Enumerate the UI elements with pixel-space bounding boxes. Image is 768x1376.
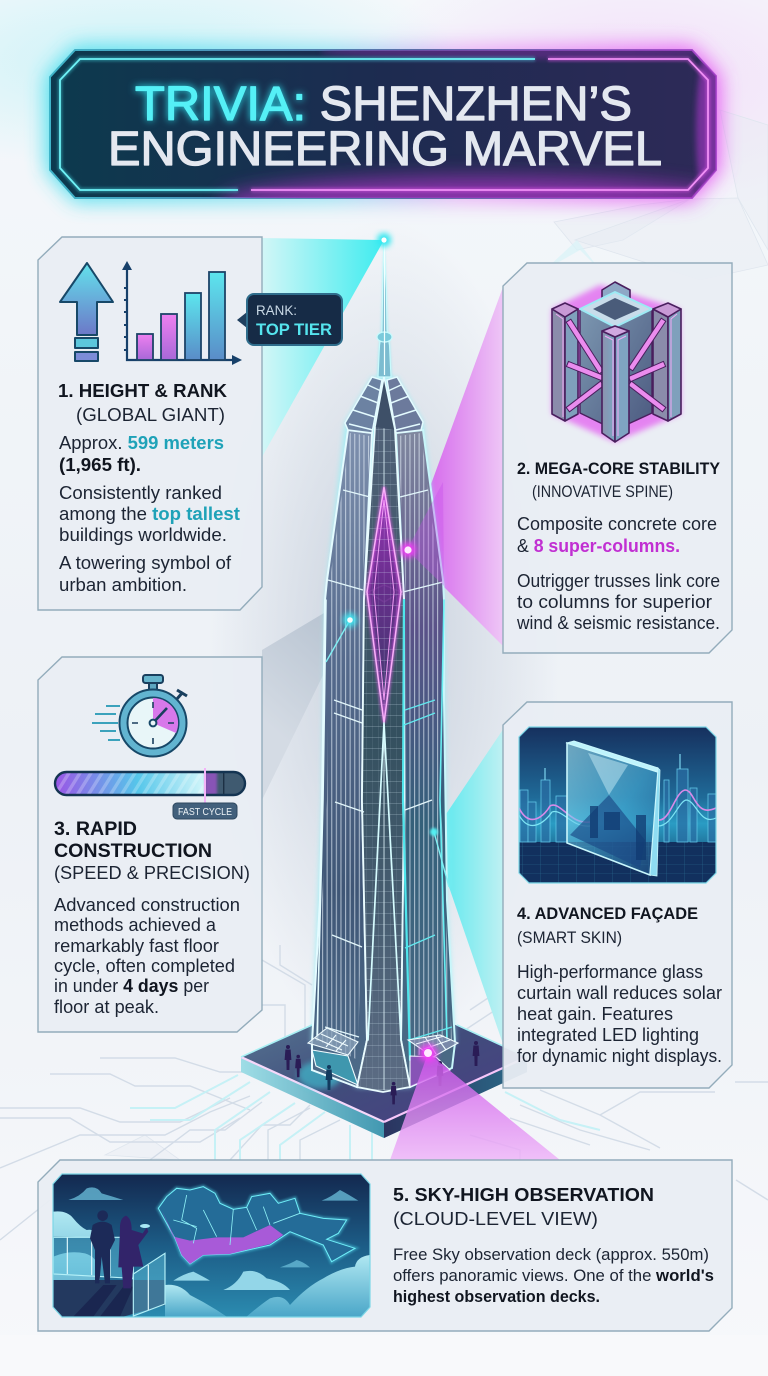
people on platform bbox=[285, 1041, 479, 1104]
heading: (CLOUD-LEVEL VIEW) bbox=[393, 1209, 598, 1229]
body text: among the top tallest bbox=[59, 504, 240, 524]
crown bbox=[345, 377, 423, 433]
title text: ENGINEERING MARVEL bbox=[108, 123, 662, 176]
side columns bbox=[552, 303, 681, 421]
struts bbox=[570, 322, 662, 408]
front column bbox=[602, 326, 629, 442]
body text bbox=[54, 895, 240, 1017]
title text bbox=[108, 78, 662, 176]
glowing traces near platform bbox=[130, 1075, 600, 1160]
body text: Consistently ranked bbox=[59, 483, 222, 503]
body text: urban ambition. bbox=[59, 575, 187, 595]
balcony floor bbox=[53, 1280, 165, 1317]
floor bands bbox=[325, 490, 452, 1040]
magenta tint on right facet bbox=[407, 482, 444, 586]
body text: Composite concrete core bbox=[517, 514, 717, 534]
heading: 3. RAPID bbox=[54, 819, 137, 840]
title text: TRIVIA: SHENZHEN’S bbox=[135, 78, 632, 131]
body text: buildings worldwide. bbox=[59, 525, 227, 545]
heading: 2. MEGA-CORE STABILITY bbox=[517, 459, 721, 478]
body text: integrated LED lighting bbox=[517, 1025, 699, 1045]
body text: Free Sky observation deck (approx. 550m) bbox=[393, 1246, 709, 1264]
heading bbox=[517, 459, 721, 501]
body text: to columns for superior bbox=[517, 592, 712, 612]
light beam: observation callout bbox=[390, 1053, 560, 1160]
body text: A towering symbol of bbox=[59, 553, 232, 573]
bar chart bbox=[122, 261, 242, 365]
cyan structural lines bbox=[317, 600, 447, 1060]
map of Shenzhen bbox=[158, 1187, 355, 1264]
small clouds bbox=[68, 1187, 358, 1267]
platform bbox=[241, 993, 527, 1138]
heading: 4. ADVANCED FAÇADE bbox=[517, 904, 698, 923]
heading bbox=[517, 904, 698, 947]
icon: up arrow bbox=[60, 263, 113, 361]
entrance canopies bbox=[308, 1028, 458, 1087]
panel: sky-high observation bbox=[38, 1160, 732, 1331]
progress bar: fast cycle bbox=[55, 768, 245, 819]
body text: in under 4 days per bbox=[54, 976, 209, 996]
heading bbox=[393, 1185, 654, 1229]
body text: floor at peak. bbox=[54, 997, 159, 1017]
light beam: facade callout bbox=[434, 728, 504, 1047]
illustration: observation deck and map bbox=[53, 1174, 370, 1317]
panel: advanced facade bbox=[503, 702, 732, 1088]
body text: Approx. 599 meters bbox=[59, 433, 224, 453]
body text: offers panoramic views. One of the world's bbox=[393, 1267, 714, 1285]
body text bbox=[517, 962, 722, 1066]
body text: wind & seismic resistance. bbox=[516, 613, 720, 633]
skyline bbox=[520, 769, 716, 842]
light beam: height callout bbox=[262, 238, 384, 457]
heading bbox=[54, 819, 250, 883]
back column bbox=[602, 282, 630, 305]
callout: rank top tier: RANK: bbox=[256, 302, 297, 318]
tower bbox=[308, 240, 458, 1092]
body text: for dynamic night displays. bbox=[517, 1046, 722, 1066]
magenta kite detail bbox=[367, 487, 401, 723]
panel: rapid construction bbox=[38, 657, 262, 1032]
heading: 1. HEIGHT & RANK bbox=[58, 381, 227, 401]
icon: mega-core columns bbox=[552, 282, 681, 442]
body text: (1,965 ft). bbox=[59, 455, 141, 475]
callout: rank top tier: TOP TIER bbox=[256, 320, 332, 339]
panel: height & rank bbox=[38, 237, 342, 610]
heading: (SPEED & PRECISION) bbox=[54, 863, 250, 883]
core bbox=[580, 292, 652, 430]
body text: highest observation decks. bbox=[393, 1288, 600, 1306]
illustration: glass facade and skyline bbox=[519, 727, 716, 883]
body text: cycle, often completed bbox=[54, 956, 235, 976]
body text bbox=[59, 433, 240, 595]
tower glow bbox=[312, 377, 455, 1087]
body text: heat gain. Features bbox=[517, 1004, 673, 1024]
floor grid bbox=[520, 842, 716, 876]
railing bbox=[53, 1237, 165, 1316]
heading: CONSTRUCTION bbox=[54, 841, 212, 862]
body text: methods achieved a bbox=[54, 915, 217, 935]
body text: Outrigger trusses link core bbox=[517, 571, 720, 591]
light beam: core callout bbox=[407, 287, 503, 646]
body text: curtain wall reduces solar bbox=[517, 983, 722, 1003]
clouds bbox=[54, 1211, 100, 1280]
panel: mega-core stability bbox=[503, 263, 732, 653]
centre facet bbox=[357, 377, 410, 1092]
progress bar: fast cycle: FAST CYCLE bbox=[178, 807, 232, 818]
spire bbox=[377, 240, 392, 378]
body text: remarkably fast floor bbox=[54, 936, 219, 956]
icon: stopwatch bbox=[92, 675, 187, 756]
light beam: construction callout bbox=[262, 613, 350, 800]
glass pane bbox=[567, 743, 658, 875]
title banner bbox=[46, 45, 740, 229]
left facet bbox=[312, 430, 372, 1087]
callout: rank top tier bbox=[237, 294, 342, 345]
heading: (INNOVATIVE SPINE) bbox=[532, 482, 673, 501]
heading bbox=[58, 381, 227, 425]
circuit board traces bbox=[0, 945, 768, 1240]
heading: (SMART SKIN) bbox=[517, 928, 622, 947]
callout light points bbox=[326, 233, 449, 1062]
right facet bbox=[396, 430, 455, 1087]
heading: 5. SKY-HIGH OBSERVATION bbox=[393, 1185, 654, 1205]
body text: & 8 super-columns. bbox=[517, 536, 680, 556]
body text bbox=[516, 514, 720, 633]
body text: High-performance glass bbox=[517, 962, 703, 982]
two visitors bbox=[90, 1210, 150, 1288]
body text: Advanced construction bbox=[54, 895, 240, 915]
heading: (GLOBAL GIANT) bbox=[76, 405, 225, 425]
body text bbox=[393, 1246, 714, 1306]
